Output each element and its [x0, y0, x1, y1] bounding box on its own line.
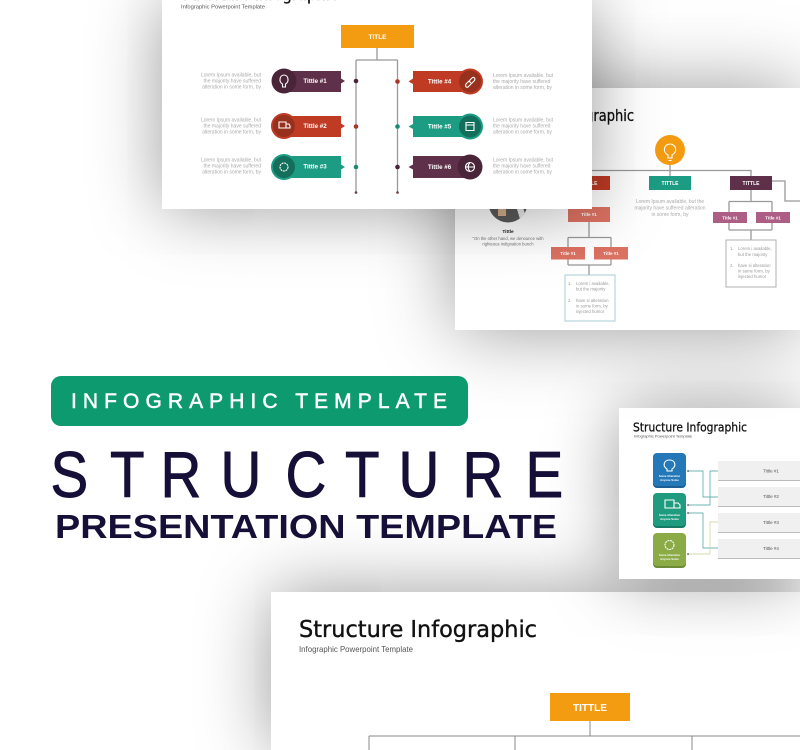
bars with titles: [718, 461, 800, 559]
list box: grey outline: 2.: [730, 263, 734, 268]
box: teal title: TITTLE: [662, 181, 679, 187]
right descriptions: alteration in some form, by: [493, 130, 552, 136]
right descriptions: Lorem Ipsum available, but: [493, 73, 554, 79]
connector lines: [356, 48, 398, 193]
person name: Tittle: [502, 229, 514, 235]
list box: blue outline: Lorem i available,: [576, 281, 610, 286]
list box: blue outline: injected humor: [576, 309, 605, 314]
title box: TITTLE: [573, 703, 607, 714]
title box: [550, 693, 630, 721]
list box: grey outline: but the majority: [738, 252, 768, 257]
text block under teal: Lorem Ipsum available, but the: [636, 199, 704, 205]
right descriptions: [493, 73, 554, 176]
icon: orange bulb: [655, 135, 685, 165]
list box: blue outline: have si alteration: [576, 298, 609, 303]
right descriptions: the majority have suffered: [493, 79, 551, 85]
item 6: Tittle #6: [428, 164, 452, 171]
panel: middle slide org chart: [455, 88, 800, 330]
item 3: [271, 154, 358, 180]
panel: side slide with cards: [619, 408, 800, 579]
left descriptions: the majority have suffered: [204, 78, 261, 84]
text block under teal: [634, 199, 706, 218]
item 2: Tittle #2: [303, 123, 327, 130]
bars with titles: Tittle #1: [763, 468, 779, 474]
connectors: [568, 165, 800, 275]
list box: blue outline: but the majority: [576, 286, 606, 292]
item 3: Tittle #3: [303, 164, 327, 170]
card: blue: Some Alteration: [659, 474, 680, 478]
item 6: [395, 154, 482, 180]
pink labels: [722, 216, 781, 220]
item 1: Tittle #1: [303, 78, 327, 85]
left descriptions: Lorem Ipsum available, but: [201, 118, 262, 124]
item 4: [395, 68, 483, 94]
list box: grey outline: injected humor: [738, 274, 767, 279]
panel: bottom slide: [271, 592, 800, 750]
box: red title: [568, 176, 610, 190]
right descriptions: alteration in some form, by: [493, 85, 552, 91]
item 5: Tittle #5: [428, 124, 452, 130]
salmon branch boxes: [551, 207, 628, 260]
bars with titles: Tittle #4: [763, 546, 779, 551]
list box: grey outline: 1.: [730, 246, 734, 251]
box: purple title: [730, 176, 772, 190]
card: teal: Anyone Some: [660, 517, 679, 521]
left descriptions: Lorem Ipsum available, but: [201, 72, 262, 78]
left descriptions: the majority have suffered: [204, 164, 261, 170]
list box: grey outline: Lorem i available,: [738, 246, 772, 251]
left descriptions: [201, 72, 262, 176]
item 5: [395, 114, 483, 140]
bars with titles: Tittle #3: [763, 520, 779, 525]
list box: grey outline: have si alteration: [738, 263, 771, 268]
pink branch boxes: [713, 212, 790, 223]
subtitle: Infographic Powerpoint Template: [299, 645, 414, 654]
org chart connectors: [369, 721, 800, 750]
badge: infographic template: [51, 376, 468, 426]
subtitle: Infographic Powerpoint Template: [634, 434, 693, 438]
item 1: [272, 68, 358, 94]
card: green: [653, 533, 686, 568]
text block under teal: in some form, by: [652, 212, 689, 218]
list box: blue outline: 2.: [568, 298, 572, 303]
card: green: Anyone Some: [660, 557, 679, 561]
pink labels: Title #1: [722, 216, 738, 220]
list box: blue outline: 1.: [568, 281, 572, 286]
salmon labels: Title #1: [560, 251, 576, 256]
list box: blue outline: [565, 275, 615, 321]
bars with titles: Tittle #2: [763, 494, 779, 499]
right descriptions: the majority have suffered: [493, 164, 551, 170]
card: teal: Some Alteration: [659, 513, 680, 517]
list box: blue outline: in some form, by: [576, 304, 609, 308]
card: teal: [653, 493, 686, 528]
salmon labels: Title #1: [603, 251, 619, 256]
title: structure: STRUCTURE: [50, 438, 563, 511]
right descriptions: alteration in some form, by: [493, 170, 552, 176]
salmon labels: Title #1: [581, 212, 597, 217]
left descriptions: alteration in some form, by: [202, 84, 261, 90]
right descriptions: the majority have suffered: [493, 124, 551, 130]
box: teal title: [649, 176, 691, 190]
quote: righteous indignation bunch: [482, 242, 534, 246]
card: blue: Anyone Some: [660, 478, 679, 482]
box: red title: TITTLE: [581, 181, 598, 187]
heading: Structure Infographic: [496, 106, 634, 125]
card: green: Some Alteration: [659, 553, 680, 557]
heading: structure infographic: Structure Infographic: [299, 617, 537, 643]
quote: [472, 236, 544, 246]
left descriptions: alteration in some form, by: [202, 170, 261, 176]
left descriptions: Lorem Ipsum available, but: [201, 158, 262, 164]
left descriptions: the majority have suffered: [204, 124, 261, 130]
quote: "On the other hand, we denounce with: [472, 236, 544, 241]
badge: infographic template: INFOGRAPHIC TEMPLATE: [71, 390, 447, 413]
item 2: [271, 113, 358, 139]
item 4: Tittle #4: [428, 78, 452, 86]
subtitle: Infographic Powerpoint Template: [181, 4, 265, 10]
photo: person: [488, 184, 528, 222]
connectors: [688, 471, 718, 554]
line end dots: [355, 191, 399, 194]
subtitle: presentation template: PRESENTATION TEMPLATE: [55, 508, 557, 545]
title box: [341, 25, 414, 48]
right descriptions: Lorem Ipsum available, but: [493, 158, 554, 164]
left descriptions: alteration in some form, by: [202, 130, 261, 136]
heading: Structure Infographic: [633, 420, 747, 434]
card: blue: [653, 453, 686, 488]
box: purple title: TITTLE: [743, 181, 760, 187]
list box: grey outline: in same form, by: [738, 268, 771, 274]
panel: top slide: [162, 0, 592, 209]
right descriptions: Lorem Ipsum available, but: [493, 118, 554, 124]
text block under teal: majority have suffered alteration: [634, 206, 706, 212]
pink labels: Title #1: [765, 216, 781, 220]
title box: TITLE: [368, 34, 387, 41]
salmon labels: [560, 212, 619, 256]
list box: grey outline: [726, 240, 776, 287]
